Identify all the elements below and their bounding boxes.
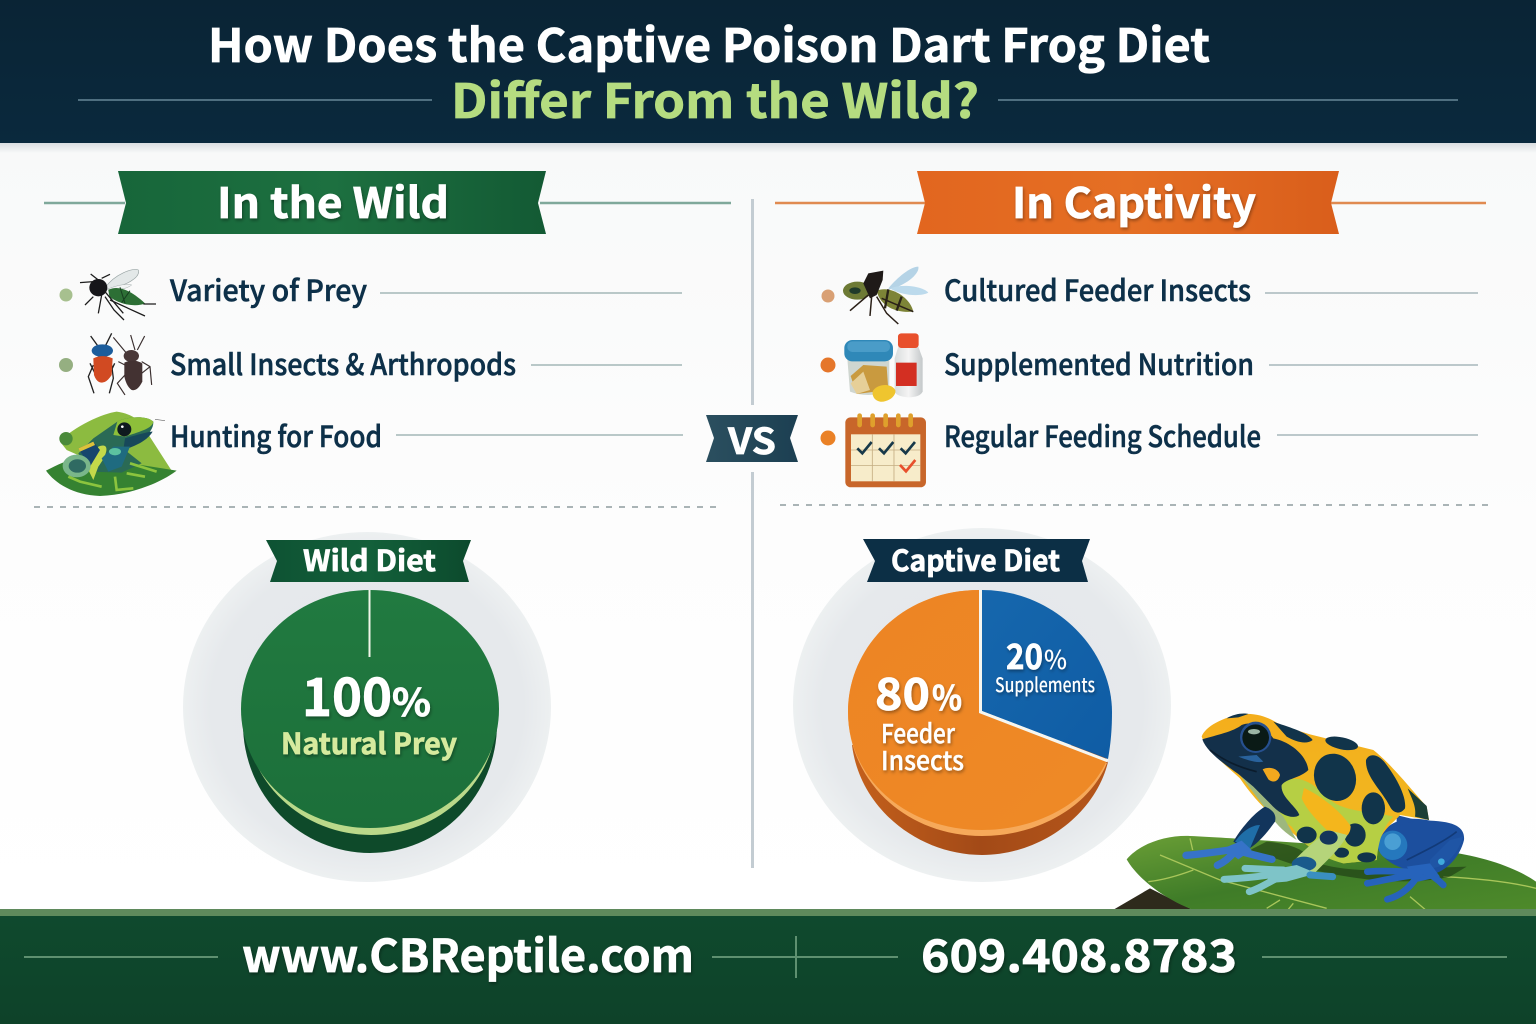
- leaf: [1127, 836, 1536, 909]
- leaf shadow: [1114, 888, 1192, 909]
- pie chart: captive diet: [793, 528, 1171, 882]
- ribbon: wild diet: [266, 538, 471, 582]
- value: 20%: %: [1044, 640, 1067, 677]
- value: 80%: Insects: [881, 741, 964, 778]
- item: supplemented nutrition: Supplemented Nutrition: [944, 342, 1254, 384]
- icon: feeder fly: [843, 267, 928, 324]
- footer website: www.CBReptile.com: [242, 920, 694, 985]
- footer band: [0, 909, 1536, 1024]
- lime belly: [1240, 775, 1393, 863]
- pie side: [243, 595, 497, 853]
- icon: green fly: [80, 269, 156, 320]
- item: cultured feeder insects: [822, 268, 1478, 310]
- orange slice: [848, 590, 1107, 836]
- item: small insects: [59, 342, 682, 384]
- icon: beetles: [88, 333, 152, 395]
- shadow under frog: [1250, 842, 1467, 881]
- title: [208, 10, 1210, 132]
- item: small insects: Small Insects & Arthropods: [170, 342, 516, 384]
- pie rim: [245, 593, 497, 835]
- value: 20%: [995, 629, 1095, 698]
- pie top: [241, 590, 499, 828]
- title: How Does the Captive Poison Dart Frog Diet: [208, 10, 1210, 76]
- page background: [0, 143, 1536, 913]
- back foot: [1430, 837, 1463, 868]
- body: [1202, 714, 1429, 863]
- panel: in captivity heading: In Captivity: [1012, 170, 1256, 231]
- spots: [1227, 714, 1429, 862]
- wild list: [46, 268, 683, 496]
- value: [281, 656, 457, 763]
- title: Differ From the Wild?: [451, 63, 979, 132]
- item: hunting for food: Hunting for Food: [170, 414, 382, 456]
- icon: calendar: [845, 416, 926, 487]
- panel: in the wild heading: [44, 170, 731, 234]
- value: 80%: 80: [875, 659, 930, 723]
- item: variety of prey: Variety of Prey: [169, 268, 367, 310]
- value: 100: [302, 656, 392, 732]
- center divider: [751, 199, 754, 868]
- item: variety of prey: [60, 268, 682, 310]
- footer phone: 609.408.8783: [921, 920, 1237, 985]
- front foot: [1268, 865, 1313, 882]
- captive list: [820, 267, 1478, 487]
- front arm: [1302, 788, 1351, 837]
- ribbon: captive diet: Captive Diet: [891, 538, 1060, 580]
- value: 20%: Supplements: [995, 669, 1095, 698]
- item: cultured feeder insects: Cultured Feeder Insects: [944, 268, 1251, 310]
- panel: in the wild heading: In the Wild: [217, 170, 449, 231]
- icon: frog on leaf: [46, 412, 177, 496]
- eye: [1240, 722, 1271, 753]
- value: 80%: %: [932, 671, 962, 720]
- pie side: [852, 745, 1108, 855]
- item: regular feeding schedule: [820, 414, 1478, 456]
- value: Natural Prey: [281, 721, 457, 763]
- header band: [0, 0, 1536, 143]
- item: supplemented nutrition: [820, 342, 1478, 384]
- head patch: [1202, 724, 1308, 817]
- icon: jar and bottle: [844, 333, 923, 402]
- dashed dividers: [34, 505, 1492, 507]
- item: regular feeding schedule: Regular Feeding Schedule: [944, 414, 1261, 456]
- back leg: [1377, 819, 1464, 875]
- value: 80%: Feeder: [881, 714, 955, 751]
- value: 80%: [875, 659, 964, 778]
- left arm and foot: [1233, 807, 1275, 850]
- VS badge: [706, 413, 798, 465]
- illustration: dart frog on leaf: [1114, 714, 1536, 909]
- value: 20%: 20: [1006, 629, 1043, 680]
- ribbon: wild diet: Wild Diet: [303, 538, 436, 580]
- value: %: [392, 672, 431, 727]
- VS badge: VS: [727, 413, 776, 465]
- pie chart: wild diet: [183, 532, 551, 882]
- panel: in captivity heading: [775, 170, 1486, 234]
- blue slice: [982, 590, 1112, 759]
